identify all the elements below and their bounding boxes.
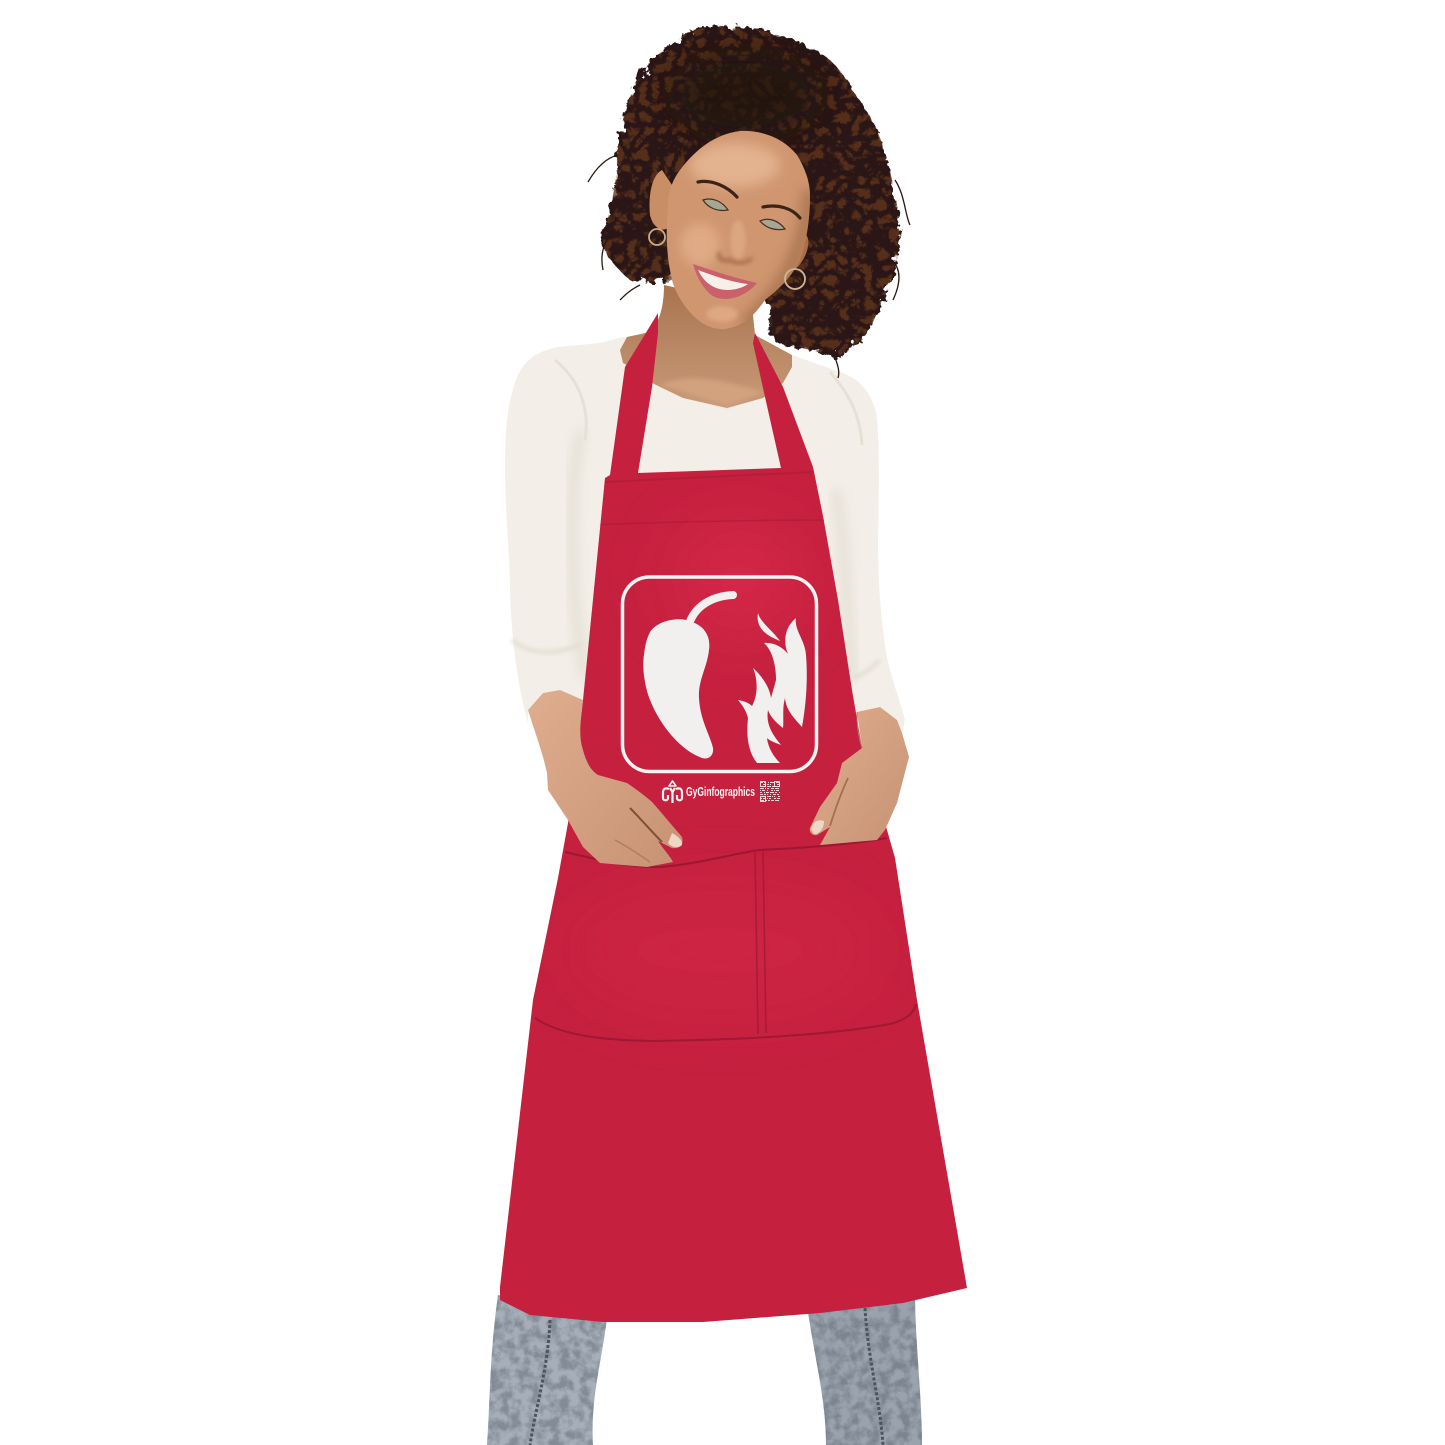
neck and chest xyxy=(620,285,792,408)
right hand in pocket xyxy=(810,707,909,845)
head xyxy=(667,131,810,329)
apron xyxy=(500,313,967,1322)
earrings xyxy=(649,229,665,245)
logo icon xyxy=(663,781,682,803)
sweater xyxy=(505,337,905,733)
left hand in pocket xyxy=(528,690,683,867)
brand name: GyGinfographics xyxy=(686,784,755,799)
ears xyxy=(650,170,672,229)
apron body xyxy=(500,313,967,1322)
pocket seams xyxy=(565,838,887,867)
mouth xyxy=(693,264,757,299)
nose xyxy=(719,252,752,263)
product photo: woman wearing red apron xyxy=(487,23,967,1445)
QR code xyxy=(760,782,780,802)
hair xyxy=(588,20,910,378)
face xyxy=(649,131,810,329)
icon frame xyxy=(622,577,816,772)
apron print xyxy=(622,577,816,803)
icon: chili pepper xyxy=(643,595,733,759)
eyebrows xyxy=(698,181,737,197)
eyes xyxy=(703,199,728,211)
jeans xyxy=(480,1290,930,1445)
icon: flames xyxy=(738,613,807,763)
